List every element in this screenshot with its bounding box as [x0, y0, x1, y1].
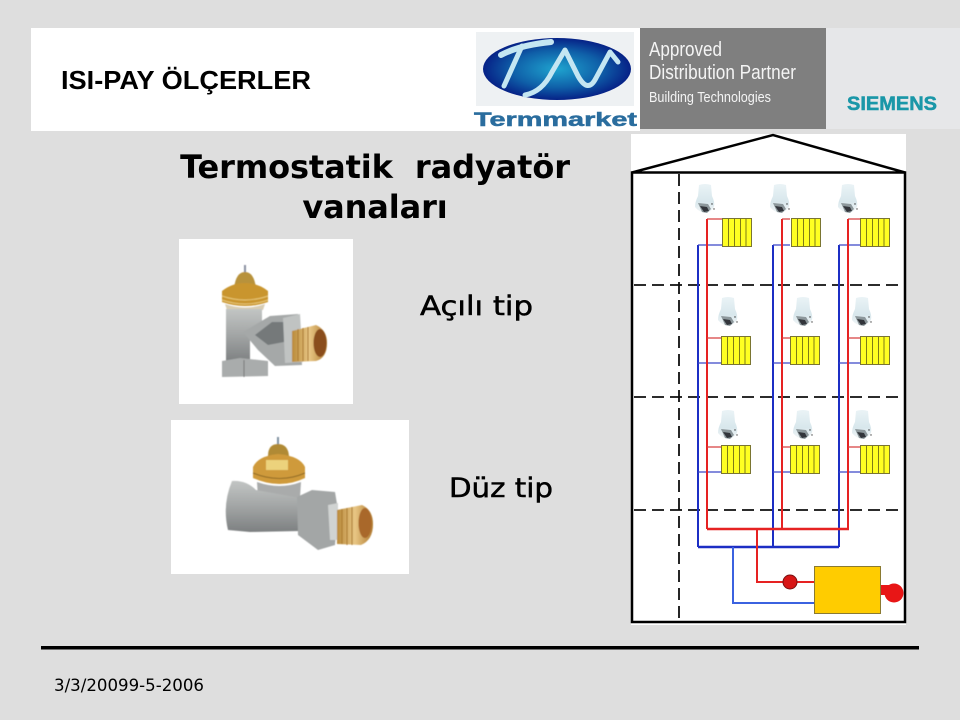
header title: ISI-PAY ÖLÇERLER	[61, 65, 311, 95]
header white band	[31, 28, 473, 131]
logo ellipse	[483, 38, 631, 100]
diagram: building heating system	[631, 134, 906, 625]
badge text: Approved	[649, 39, 722, 61]
footer rule	[41, 646, 919, 650]
logo wordmark: Termmarket	[474, 110, 638, 131]
badge text: Distribution Partner	[649, 62, 796, 84]
image: angled valve	[179, 239, 353, 404]
boiler	[814, 566, 880, 614]
badge text: Building Technologies	[649, 89, 771, 106]
badge text	[649, 39, 796, 106]
panel: Siemens partner badge	[640, 28, 960, 129]
logo monogram	[501, 42, 618, 95]
burner	[881, 585, 892, 595]
image: straight valve	[171, 420, 409, 574]
label: straight type: Düz tip	[449, 473, 553, 504]
blue return pipes	[698, 245, 839, 547]
circulation pump	[783, 575, 797, 589]
red supply pipes	[707, 219, 849, 582]
floor dashed lines	[634, 174, 903, 622]
label: angled type: Açılı tip	[420, 291, 533, 322]
logo: Termmarket	[473, 28, 640, 131]
building outline	[632, 135, 905, 622]
Siemens wordmark: SIEMENS	[847, 94, 937, 115]
radiators	[721, 218, 890, 474]
main heading: Termostatik radyatör vanaları	[180, 148, 570, 226]
thermostatic heads	[695, 184, 872, 439]
footer date: 3/3/20099-5-2006	[54, 676, 204, 696]
